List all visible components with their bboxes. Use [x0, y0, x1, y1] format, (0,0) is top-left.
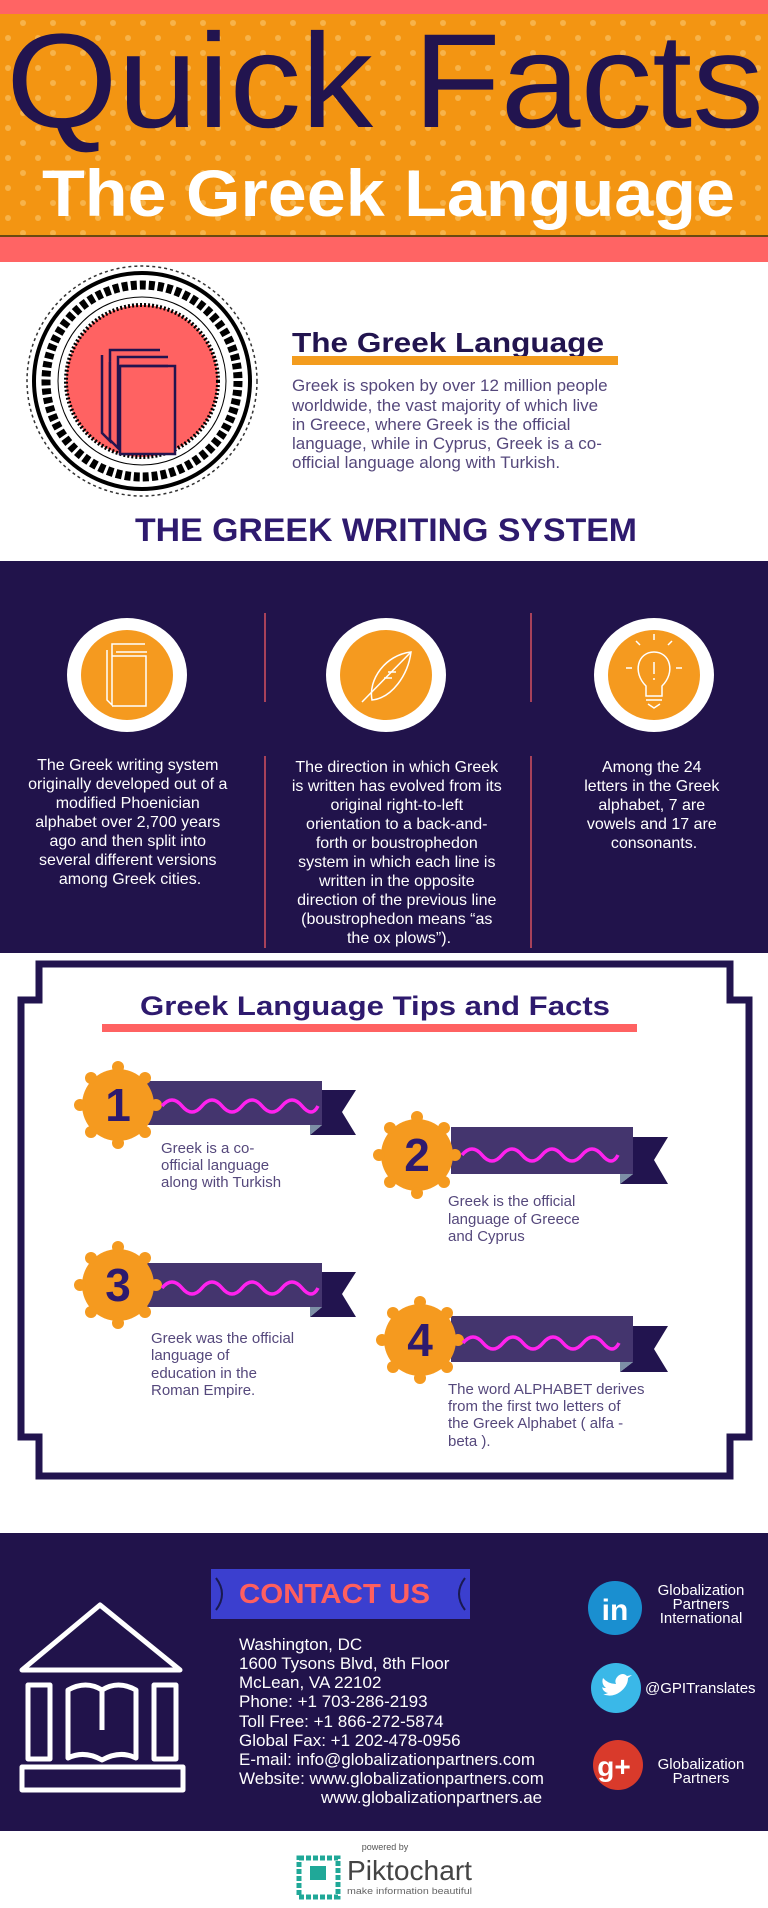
heading: tips and facts: Greek Language Tips and Facts — [140, 991, 610, 1021]
icon: linkedin — [588, 1581, 642, 1635]
text: linkedin: Partners — [673, 1596, 729, 1613]
text: column 3: letters in the Greek — [584, 778, 720, 795]
tip 3: language of — [151, 1347, 230, 1364]
text: column 3: consonants. — [611, 835, 697, 852]
icon: linkedin: in — [602, 1594, 628, 1627]
header banner — [0, 0, 768, 262]
text: column 2: direction of the previous line — [297, 892, 496, 909]
tip 4: from the first two letters of — [448, 1398, 621, 1415]
text: column 2: The direction in which Greek — [295, 759, 499, 776]
panel: tips frame — [21, 964, 749, 1476]
panel: writing system — [0, 561, 768, 953]
text: column 2: orientation to a back-and- — [306, 816, 488, 833]
tip 4: 4 — [407, 1314, 433, 1366]
panel: contact — [0, 1533, 768, 1831]
tip 1 — [74, 1061, 356, 1191]
tip 2: Greek is the official — [448, 1193, 575, 1210]
text: address: Washington, DC — [239, 1635, 362, 1654]
text: address: www.globalizationpartners.ae — [320, 1788, 542, 1807]
tip 4 — [376, 1296, 668, 1450]
icon: google plus — [593, 1740, 643, 1790]
text: column 1: alphabet over 2,700 years — [35, 814, 220, 831]
text: linkedin: Globalization — [658, 1582, 744, 1599]
tip 2: and Cyprus — [448, 1228, 525, 1245]
text block: intro: worldwide, the vast majority of which live — [291, 396, 598, 415]
text: address: Global Fax: +1 202-478-0956 — [239, 1731, 461, 1750]
text: column 1: The Greek writing system — [37, 757, 218, 774]
icon: books — [67, 618, 187, 732]
text: twitter: @GPITranslates — [645, 1680, 756, 1697]
text: column 1: modified Phoenician — [56, 795, 200, 812]
footer: piktochart logo: Piktochart — [347, 1855, 472, 1886]
text: column 2: is written has evolved from its — [292, 778, 502, 795]
tip 4: the Greek Alphabet ( alfa - — [448, 1415, 623, 1432]
icon: twitter — [591, 1663, 641, 1713]
title: Quick Facts: Quick Facts — [6, 7, 764, 156]
text: address: Toll Free: +1 866-272-5874 — [239, 1712, 444, 1731]
heading: The Greek Language — [292, 327, 618, 365]
text: address: Website: www.globalizationpartners.com — [239, 1769, 544, 1788]
text: address: McLean, VA 22102 — [239, 1673, 381, 1692]
text: column 2: original right-to-left — [331, 797, 464, 814]
tip 4: The word ALPHABET derives — [448, 1381, 644, 1398]
text: column 1: among Greek cities. — [59, 871, 201, 888]
heading: The Greek Language: The Greek Language — [292, 327, 604, 358]
text: column 2: system in which each line is — [298, 854, 495, 871]
tip 2 — [373, 1111, 668, 1245]
tip 2: language of Greece — [448, 1211, 580, 1228]
text: column 2: written in the opposite — [318, 873, 475, 890]
tip 3 — [74, 1241, 356, 1399]
text: column 3: Among the 24 — [602, 759, 702, 776]
text: column 2: (boustrophedon means “as — [301, 911, 492, 928]
text: column 1: several different versions — [39, 852, 217, 869]
text block: intro: in Greece, where Greek is the official — [292, 415, 570, 434]
text: column 1: originally developed out of a — [28, 776, 228, 793]
text: google plus: Partners — [673, 1770, 729, 1787]
text: address: Phone: +1 703-286-2193 — [239, 1692, 428, 1711]
text block: intro: Greek is spoken by over 12 million people — [292, 376, 608, 395]
tip 1: official language — [161, 1157, 269, 1174]
heading: tips and facts — [102, 991, 637, 1032]
text: address: 1600 Tysons Blvd, 8th Floor — [239, 1654, 450, 1673]
footer: piktochart logo: powered by — [362, 1842, 409, 1852]
tip 3: Roman Empire. — [151, 1382, 255, 1399]
text: column 2: the ox plows”). — [347, 930, 451, 947]
icon: ornamental book badge — [27, 266, 257, 496]
text: linkedin: International — [660, 1610, 742, 1627]
text: column 3: vowels and 17 are — [587, 816, 717, 833]
tip 3: education in the — [151, 1365, 257, 1382]
text: column 1: ago and then split into — [49, 833, 206, 850]
icon: feather — [326, 618, 446, 732]
footer: piktochart logo: make information beautiful — [347, 1886, 472, 1896]
text block: intro: language, while in Cyprus, Greek is a co- — [292, 434, 602, 453]
text: google plus: Globalization — [658, 1756, 744, 1773]
icon: building with book — [22, 1605, 183, 1790]
tip 1: Greek is a co- — [161, 1140, 254, 1157]
tip 1: along with Turkish — [161, 1174, 281, 1191]
tip 2: 2 — [404, 1129, 430, 1181]
tip 1: 1 — [105, 1079, 131, 1131]
footer: piktochart logo — [299, 1842, 472, 1897]
subtitle: The Greek Language: The Greek Language — [42, 156, 735, 230]
contact us banner — [211, 1569, 470, 1619]
tip 3: Greek was the official — [151, 1330, 294, 1347]
text block: intro: official language along with Turkish. — [292, 453, 560, 472]
tip 4: beta ). — [448, 1433, 491, 1450]
icon: google plus: g+ — [597, 1751, 631, 1782]
tip 3: 3 — [105, 1259, 131, 1311]
contact us banner: CONTACT US — [239, 1578, 430, 1609]
text: column 3: alphabet, 7 are — [598, 797, 705, 814]
icon: light bulb — [594, 618, 714, 732]
text: column 2: forth or boustrophedon — [316, 835, 478, 852]
heading: The Greek Writing System: THE GREEK WRITING SYSTEM — [135, 512, 637, 548]
text: address: E-mail: info@globalizationpartners.com — [239, 1750, 535, 1769]
